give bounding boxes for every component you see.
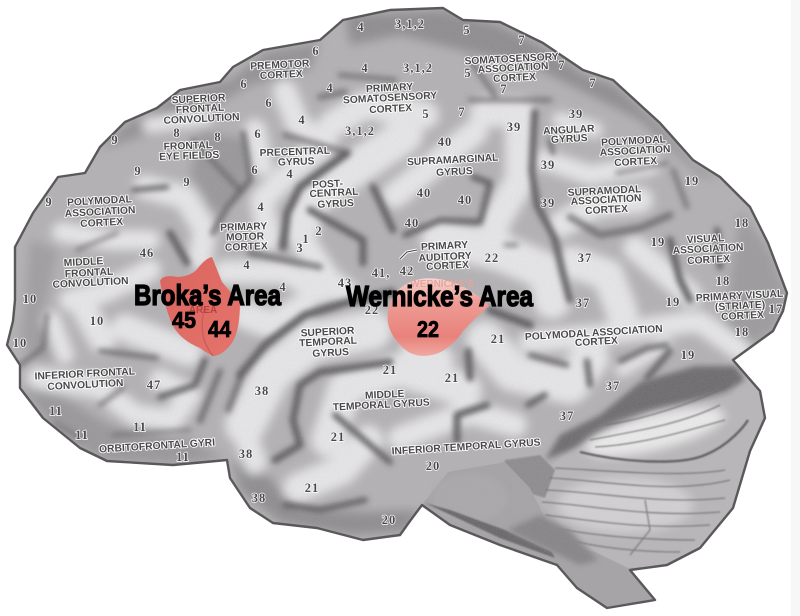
label: superior temporal gyrus: GYRUS xyxy=(312,347,349,360)
Brodmann area numbers: 40 xyxy=(417,186,431,200)
label: precentral gyrus xyxy=(260,146,331,169)
label: supramodal association cortex: SUPRAMODAL xyxy=(567,184,642,199)
label: visual association cortex: ASSOCIATION xyxy=(672,242,744,257)
label: visual association cortex: CORTEX xyxy=(687,254,730,267)
parietal and occipital gyri xyxy=(395,132,475,195)
Brodmann area numbers: 41, xyxy=(372,266,390,280)
label: middle frontal convolution xyxy=(51,255,129,291)
Brodmann area numbers: 6 xyxy=(265,96,273,110)
label: polymodal association cortex, temporal: CORTEX xyxy=(575,336,618,349)
Brodmann area numbers: 39 xyxy=(541,158,555,172)
label: middle frontal convolution: FRONTAL xyxy=(65,267,114,280)
Brodmann area numbers: 8 xyxy=(173,126,181,140)
Brodmann area numbers: 3 xyxy=(296,241,304,255)
Brodmann area numbers: 11 xyxy=(133,420,147,434)
Brodmann area numbers: 40 xyxy=(458,193,472,207)
central gyri xyxy=(262,92,325,240)
Brodmann area numbers: 3,1,2 xyxy=(345,124,375,138)
Brodmann area numbers: 39 xyxy=(507,120,521,134)
label: inferior frontal convolution xyxy=(34,366,136,394)
Brodmann area numbers: 3,1,2 xyxy=(403,61,433,75)
label: somatosensory association cortex: SOMATOSENSORY xyxy=(464,52,559,68)
Brodmann area numbers: 21 xyxy=(331,430,345,444)
Brodmann area numbers: 17 xyxy=(769,302,783,316)
Brodmann area numbers: 40 xyxy=(405,216,419,230)
label: primary visual striate cortex xyxy=(696,289,785,324)
Brodmann area numbers: 19 xyxy=(681,348,695,362)
Brodmann area numbers: 6 xyxy=(312,44,320,58)
label: premotor cortex: PREMOTOR xyxy=(250,58,310,73)
label: frontal eye fields xyxy=(159,140,220,163)
film grain texture xyxy=(36,14,746,562)
Brodmann area numbers: 10 xyxy=(13,336,27,350)
label: middle frontal convolution: CONVOLUTION xyxy=(52,276,129,291)
Brodmann area numbers: 9 xyxy=(111,133,119,147)
label: polymodal association cortex, parietal: CORTEX xyxy=(614,156,657,169)
label: angular gyrus: ANGULAR xyxy=(543,124,595,137)
Brodmann area numbers: 18 xyxy=(735,325,749,339)
Brodmann area numbers: 11 xyxy=(75,428,89,442)
Brodmann area numbers: 4 xyxy=(326,81,334,95)
label: middle frontal convolution: MIDDLE xyxy=(64,256,104,269)
label: primary auditory cortex: CORTEX xyxy=(426,260,469,273)
Brodmann area numbers: 37 xyxy=(578,251,592,265)
Brodmann area numbers: 5 xyxy=(463,23,471,37)
label: superior frontal convolution: FRONTAL xyxy=(176,103,225,116)
Brodmann area numbers: 22 xyxy=(485,251,499,265)
Brodmann area numbers: 9 xyxy=(183,175,191,189)
label: polymodal association cortex, temporal xyxy=(525,324,664,352)
label: inferior temporal gyrus: INFERIOR TEMPORAL GYRUS xyxy=(391,437,541,458)
label: middle temporal gyrus: MIDDLE xyxy=(365,389,405,402)
Brodmann area numbers: 39 xyxy=(541,196,555,210)
label: premotor cortex xyxy=(250,58,311,83)
Brodmann area numbers: 4 xyxy=(298,113,306,127)
label: middle temporal gyrus: TEMPORAL GYRUS xyxy=(333,397,430,414)
label: inferior frontal convolution: INFERIOR FRONTAL xyxy=(34,366,135,383)
label: superior frontal convolution xyxy=(162,92,240,127)
label: primary visual striate cortex: PRIMARY VISUAL xyxy=(696,289,784,304)
label: primary motor cortex: CORTEX xyxy=(225,241,268,254)
label: primary somatosensory cortex xyxy=(342,81,438,117)
highlight: Broca's area xyxy=(160,257,240,356)
label: primary auditory cortex: PRIMARY xyxy=(421,240,468,253)
label: visual association cortex xyxy=(672,232,744,268)
label: precentral gyrus: GYRUS xyxy=(278,156,315,169)
label: superior frontal convolution: CONVOLUTION xyxy=(163,112,240,127)
area number 45: 45 xyxy=(172,307,196,333)
label: visual association cortex: VISUAL xyxy=(686,233,725,246)
Brodmann area numbers: 20 xyxy=(426,459,440,473)
Brodmann area numbers: 19 xyxy=(685,174,699,188)
label: angular gyrus xyxy=(543,124,596,146)
label: precentral gyrus: PRECENTRAL xyxy=(260,146,330,159)
Brodmann area numbers: 2 xyxy=(315,224,323,238)
label: primary motor cortex: PRIMARY xyxy=(220,221,268,234)
area number 22: 22 xyxy=(417,316,439,342)
label: primary motor cortex xyxy=(220,221,268,254)
Brodmann area numbers: 11 xyxy=(176,450,190,464)
label: polymodal association cortex, frontal: ASSOCIATION xyxy=(65,205,136,220)
Brodmann area numbers: 20 xyxy=(382,513,396,527)
label: superior temporal gyrus: SUPERIOR xyxy=(300,326,355,339)
label: frontal eye fields: FRONTAL xyxy=(163,140,212,153)
label: somatosensory association cortex xyxy=(464,52,560,86)
label: supramodal association cortex xyxy=(567,184,643,218)
label: postcentral gyrus: POST- xyxy=(312,178,344,191)
Brodmann area numbers: 4 xyxy=(243,258,251,272)
highlight: Broca's area: AREA xyxy=(189,305,217,316)
label: postcentral gyrus: CENTRAL xyxy=(309,187,359,200)
Brodmann area numbers: 47 xyxy=(147,378,161,392)
Brodmann area numbers: 7 xyxy=(589,76,597,90)
Brodmann area numbers: 10 xyxy=(90,314,104,328)
label: supramodal association cortex: ASSOCIATION xyxy=(570,193,642,208)
Brodmann area numbers: 4 xyxy=(357,20,365,34)
Brodmann area numbers: 6 xyxy=(240,77,248,91)
label: primary somatosensory cortex: SOMATOSENSORY xyxy=(343,91,438,106)
label: primary auditory cortex xyxy=(418,240,473,273)
label: primary auditory cortex: AUDITORY xyxy=(418,251,472,264)
edge shading xyxy=(345,10,720,180)
label: premotor cortex: CORTEX xyxy=(260,69,303,82)
label: supramarginal gyrus: GYRUS xyxy=(436,166,473,179)
Brodmann area numbers: 3,1,2 xyxy=(395,17,425,31)
Brodmann area numbers: 7 xyxy=(558,58,566,72)
label: somatosensory association cortex: CORTEX xyxy=(493,72,536,85)
label: middle temporal gyrus xyxy=(332,387,430,414)
Brodmann area numbers: 4 xyxy=(257,200,265,214)
label: supramodal association cortex: CORTEX xyxy=(585,204,628,217)
Brodmann area numbers: 46 xyxy=(140,246,154,260)
label: frontal eye fields: EYE FIELDS xyxy=(159,150,220,163)
heading: Wernicke's Area: Wernicke’s Area xyxy=(346,281,534,313)
Brodmann area numbers: 43 xyxy=(338,276,352,290)
label: postcentral gyrus xyxy=(309,178,359,211)
Brodmann area numbers: 4 xyxy=(286,167,294,181)
label: superior temporal gyrus xyxy=(298,326,358,361)
heading: Broka's Area: Broka’s Area xyxy=(134,280,282,312)
main sulci xyxy=(240,292,392,375)
Brodmann area numbers: 42 xyxy=(400,264,414,278)
label: supramarginal gyrus: SUPRAMARGINAL xyxy=(407,153,499,168)
Brodmann area numbers: 21 xyxy=(305,481,319,495)
frontal gyri xyxy=(145,187,205,258)
label: supramarginal gyrus xyxy=(407,153,499,180)
Brodmann area numbers: 8 xyxy=(214,130,222,144)
label: primary somatosensory cortex: PRIMARY xyxy=(366,82,413,95)
label: polymodal association cortex, parietal: POLYMODAL xyxy=(601,134,666,149)
label: inferior frontal convolution: CONVOLUTION xyxy=(47,378,124,393)
Brodmann area numbers: 7 xyxy=(518,33,526,47)
label: polymodal association cortex, temporal: POLYMODAL ASSOCIATION xyxy=(525,324,663,343)
temporal gyri xyxy=(245,330,372,425)
Brodmann area numbers: 11 xyxy=(49,404,63,418)
Brodmann area numbers: 37 xyxy=(576,296,590,310)
label: superior temporal gyrus: TEMPORAL xyxy=(299,336,357,350)
Brodmann area numbers: 38 xyxy=(239,447,253,461)
Brodmann area numbers: 19 xyxy=(651,235,665,249)
cerebellum xyxy=(504,362,750,556)
Brodmann area numbers: 9 xyxy=(45,195,53,209)
highlight: Wernicke's area: WERNICKE'S xyxy=(410,279,474,290)
Brodmann area numbers: 38 xyxy=(255,384,269,398)
label: somatosensory association cortex: ASSOCIATION xyxy=(477,61,549,76)
Brodmann area numbers: 9 xyxy=(134,164,142,178)
label: polymodal association cortex, frontal: POLYMODAL xyxy=(67,194,132,209)
Brodmann area numbers: 4 xyxy=(279,280,287,294)
Brodmann area numbers: 18 xyxy=(735,216,749,230)
Brodmann area numbers: 21 xyxy=(383,363,397,377)
Brodmann area numbers: 40 xyxy=(438,135,452,149)
dark gap under temporal lobe xyxy=(545,366,745,460)
label: primary motor cortex: MOTOR xyxy=(226,231,265,244)
Brodmann area numbers: 6 xyxy=(254,127,262,141)
Brodmann area numbers xyxy=(13,17,783,527)
Brodmann area numbers: 4 xyxy=(361,61,369,75)
label: polymodal association cortex, frontal xyxy=(64,194,136,231)
label: primary somatosensory cortex: CORTEX xyxy=(369,103,412,116)
callout: arrow to primary auditory cortex xyxy=(400,250,417,259)
Brodmann area numbers: 37 xyxy=(560,409,574,423)
label: postcentral gyrus: GYRUS xyxy=(317,198,354,211)
Brodmann area numbers: 5 xyxy=(464,66,472,80)
Brodmann area numbers: 10 xyxy=(23,292,37,306)
label: primary visual striate cortex: (STRIATE) xyxy=(715,300,765,313)
label: primary visual striate cortex: CORTEX xyxy=(721,310,764,323)
Brodmann area numbers: 37 xyxy=(606,379,620,393)
Brodmann area numbers: 6 xyxy=(251,163,259,177)
Brodmann area numbers: 7 xyxy=(458,105,466,119)
Brodmann area numbers: 1 xyxy=(302,232,310,246)
label: polymodal association cortex, parietal: ASSOCIATION xyxy=(599,144,671,159)
brainstem xyxy=(422,462,655,608)
Brodmann area numbers: 21 xyxy=(491,332,505,346)
Brodmann area numbers: 22 xyxy=(365,303,379,317)
highlight: Wernicke's area xyxy=(388,278,489,356)
Brodmann area numbers: 5 xyxy=(422,107,430,121)
label: polymodal association cortex, frontal: CORTEX xyxy=(80,217,124,230)
Brodmann area numbers: 18 xyxy=(716,274,730,288)
label: angular gyrus: GYRUS xyxy=(551,133,588,146)
label: polymodal association cortex, parietal xyxy=(599,134,671,170)
Brodmann area numbers: 19 xyxy=(666,295,680,309)
label: superior frontal convolution: SUPERIOR xyxy=(171,93,226,106)
area number 44: 44 xyxy=(208,316,231,342)
Brodmann area numbers: 7 xyxy=(500,82,508,96)
label: orbitofrontal gyri: ORBITOFRONTAL GYRI xyxy=(99,437,216,456)
Brodmann area numbers: 21 xyxy=(445,371,459,385)
Brodmann area numbers: 39 xyxy=(569,107,583,121)
Brodmann area numbers: 38 xyxy=(252,491,266,505)
